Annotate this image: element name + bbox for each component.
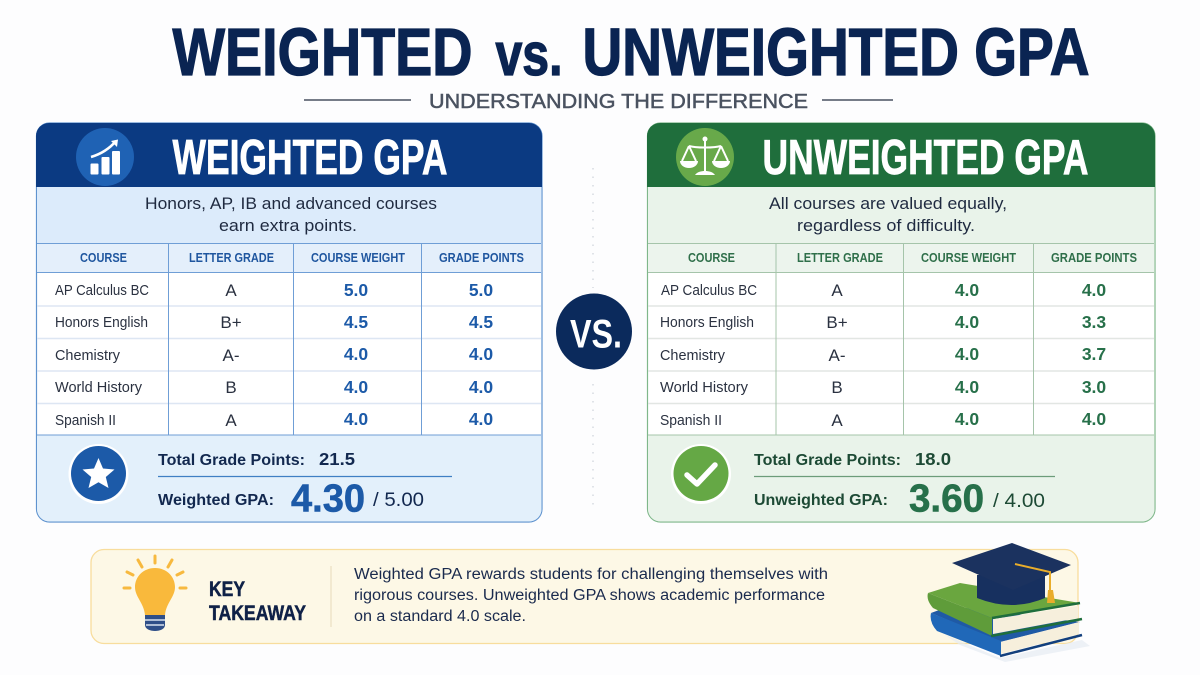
row: AP Calculus BC: AP Calculus BC bbox=[55, 282, 149, 299]
row: Spanish II: A bbox=[831, 411, 843, 430]
row: AP Calculus BC: 5.0 bbox=[344, 280, 368, 300]
row: Spanish II bbox=[55, 409, 493, 430]
row: Honors English: Honors English bbox=[660, 314, 754, 331]
row: AP Calculus BC: 4.0 bbox=[1082, 280, 1106, 300]
unweighted total grade points: Total Grade Points: bbox=[754, 452, 901, 469]
weighted description: earn extra points. bbox=[219, 217, 357, 235]
row: World History: B bbox=[831, 378, 843, 397]
icon: balance scales bbox=[676, 128, 734, 186]
row: Chemistry: Chemistry bbox=[660, 347, 725, 364]
row: World History: 4.0 bbox=[469, 377, 493, 397]
row: Chemistry: 4.0 bbox=[955, 344, 979, 364]
weighted total grade points: 21.5 bbox=[319, 449, 355, 469]
row: World History: World History bbox=[660, 379, 748, 396]
title bbox=[172, 16, 1090, 90]
row: Chemistry: A- bbox=[222, 346, 240, 365]
weighted GPA result bbox=[158, 478, 424, 520]
title: WEIGHTED bbox=[172, 16, 472, 90]
weighted table header: COURSE WEIGHT bbox=[311, 251, 405, 265]
panel: unweighted GPA bbox=[647, 123, 1155, 522]
row: Honors English: 4.5 bbox=[469, 312, 493, 332]
title: UNWEIGHTED GPA bbox=[582, 16, 1090, 90]
row: Chemistry: 4.0 bbox=[344, 344, 368, 364]
unweighted heading: UNWEIGHTED GPA bbox=[762, 131, 1088, 185]
icon: books and graduation cap bbox=[928, 543, 1090, 662]
unweighted total grade points bbox=[754, 449, 951, 469]
row: AP Calculus BC bbox=[55, 280, 493, 300]
row: AP Calculus BC: AP Calculus BC bbox=[661, 282, 757, 299]
weighted description bbox=[37, 187, 542, 243]
icon: light bulb bbox=[124, 556, 186, 631]
row: Spanish II: 4.0 bbox=[955, 409, 979, 429]
row: AP Calculus BC: 4.0 bbox=[955, 280, 979, 300]
weighted table header bbox=[80, 251, 524, 265]
row: Spanish II: 4.0 bbox=[469, 409, 493, 429]
key takeaway text bbox=[354, 566, 828, 625]
title: vs. bbox=[496, 21, 562, 88]
unweighted total grade points: 18.0 bbox=[915, 449, 951, 469]
weighted summary bbox=[37, 436, 542, 522]
unweighted table header: GRADE POINTS bbox=[1051, 251, 1137, 265]
unweighted table header bbox=[688, 251, 1137, 265]
row: World History bbox=[660, 377, 1106, 397]
weighted total grade points: Total Grade Points: bbox=[158, 452, 305, 469]
row: Spanish II bbox=[660, 409, 1106, 430]
unweighted header band bbox=[647, 123, 1155, 187]
row: World History: B bbox=[225, 378, 237, 397]
key takeaway label: TAKEAWAY bbox=[209, 602, 306, 625]
unweighted table header: COURSE WEIGHT bbox=[921, 251, 1016, 265]
unweighted GPA result: 3.60 bbox=[909, 478, 984, 520]
row: World History bbox=[55, 377, 493, 397]
weighted GPA result: / 5.00 bbox=[373, 490, 424, 511]
row: AP Calculus BC: 5.0 bbox=[469, 280, 493, 300]
unweighted GPA result: Unweighted GPA: bbox=[754, 492, 888, 509]
row: World History: 4.0 bbox=[955, 377, 979, 397]
row: Spanish II: Spanish II bbox=[660, 412, 722, 429]
key takeaway text: Weighted GPA rewards students for challenging themselves with bbox=[354, 566, 828, 583]
row: World History: 4.0 bbox=[344, 377, 368, 397]
unweighted description: regardless of difficulty. bbox=[797, 217, 975, 235]
row: AP Calculus BC: A bbox=[225, 281, 237, 300]
unweighted description: All courses are valued equally, bbox=[769, 195, 1007, 213]
icon: check badge bbox=[671, 444, 731, 504]
unweighted summary bbox=[648, 436, 1154, 522]
key takeaway label bbox=[209, 578, 306, 625]
weighted table bbox=[37, 243, 542, 435]
row: Chemistry: 4.0 bbox=[469, 344, 493, 364]
unweighted description bbox=[648, 187, 1154, 243]
icon: rising bar chart bbox=[76, 128, 134, 186]
weighted description: Honors, AP, IB and advanced courses bbox=[145, 195, 437, 213]
key takeaway label: KEY bbox=[209, 578, 245, 601]
vs divider bbox=[556, 168, 632, 505]
unweighted GPA result bbox=[754, 478, 1045, 520]
row: Honors English: 4.5 bbox=[344, 312, 368, 332]
weighted total grade points bbox=[158, 449, 355, 469]
weighted table header: GRADE POINTS bbox=[439, 251, 524, 265]
row: Honors English bbox=[660, 312, 1106, 332]
unweighted GPA result: / 4.00 bbox=[993, 491, 1045, 512]
row: Honors English bbox=[55, 312, 493, 332]
weighted table header: LETTER GRADE bbox=[189, 251, 274, 265]
key takeaway banner bbox=[91, 543, 1090, 662]
vs divider: VS. bbox=[570, 312, 622, 356]
panel: weighted GPA bbox=[36, 123, 542, 522]
unweighted table bbox=[648, 243, 1154, 435]
row: Spanish II: Spanish II bbox=[55, 412, 116, 429]
weighted heading: WEIGHTED GPA bbox=[172, 131, 448, 185]
row: Chemistry: A- bbox=[828, 346, 846, 365]
row: Honors English: Honors English bbox=[55, 314, 148, 331]
weighted GPA result: Weighted GPA: bbox=[158, 492, 274, 509]
row: Chemistry: Chemistry bbox=[55, 347, 120, 364]
key takeaway text: rigorous courses. Unweighted GPA shows academic performance bbox=[354, 587, 825, 604]
row: Honors English: 3.3 bbox=[1082, 312, 1106, 332]
unweighted table header: LETTER GRADE bbox=[797, 251, 883, 265]
subtitle: UNDERSTANDING THE DIFFERENCE bbox=[429, 90, 808, 113]
unweighted table header: COURSE bbox=[688, 251, 735, 265]
icon: star badge bbox=[68, 444, 128, 504]
row: Chemistry bbox=[660, 344, 1106, 365]
weighted table header: COURSE bbox=[80, 251, 127, 265]
row: Honors English: B+ bbox=[220, 313, 242, 332]
row: Honors English: 4.0 bbox=[955, 312, 979, 332]
row: Spanish II: 4.0 bbox=[344, 409, 368, 429]
weighted header band bbox=[36, 123, 542, 187]
row: Chemistry: 3.7 bbox=[1082, 344, 1106, 364]
row: World History: 3.0 bbox=[1082, 377, 1106, 397]
row: Chemistry bbox=[55, 344, 493, 365]
row: Spanish II: 4.0 bbox=[1082, 409, 1106, 429]
key takeaway text: on a standard 4.0 scale. bbox=[354, 608, 526, 625]
row: Honors English: B+ bbox=[826, 313, 848, 332]
weighted GPA result: 4.30 bbox=[291, 478, 365, 520]
row: AP Calculus BC: A bbox=[831, 281, 843, 300]
row: World History: World History bbox=[55, 379, 142, 396]
row: AP Calculus BC bbox=[661, 280, 1106, 300]
row: Spanish II: A bbox=[225, 411, 237, 430]
